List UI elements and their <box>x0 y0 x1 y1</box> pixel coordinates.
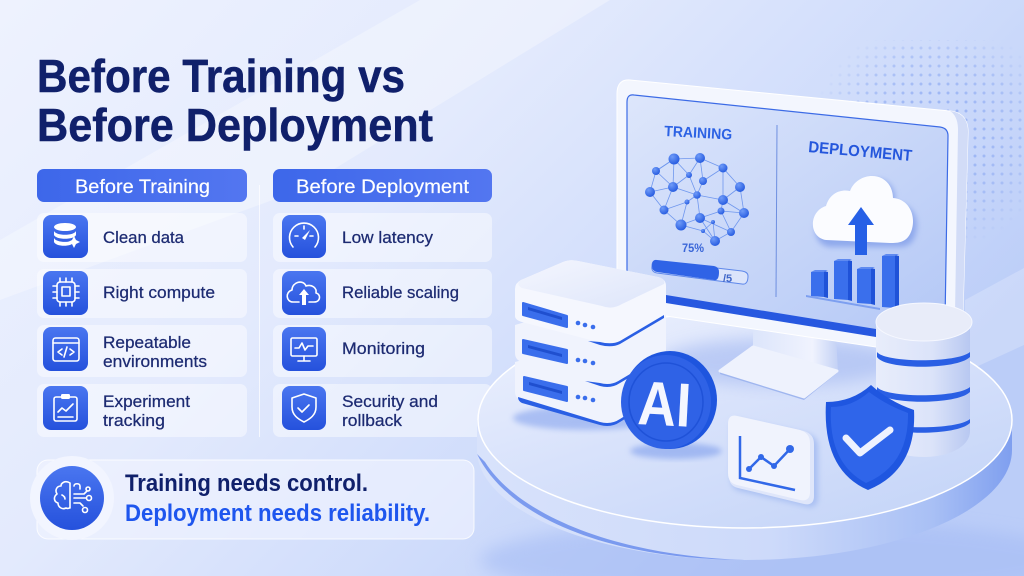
icon: line chart card <box>728 416 818 507</box>
divider between columns <box>259 185 260 437</box>
row: repeatable environments: environments <box>103 352 207 371</box>
progress bar: /5 <box>723 273 732 285</box>
row: experiment tracking: tracking <box>103 411 165 430</box>
title: Before Deployment <box>37 99 433 151</box>
title <box>37 50 433 151</box>
neural network <box>645 153 749 246</box>
row: clean data: Clean data <box>103 228 185 247</box>
monitor <box>617 80 968 400</box>
cloud upload <box>813 176 917 255</box>
heading: before deployment <box>273 169 492 202</box>
callout text: Deployment needs reliability. <box>125 500 430 527</box>
row: experiment tracking: Experiment <box>103 392 190 411</box>
row: low latency <box>273 213 492 262</box>
callout text <box>125 470 430 527</box>
panel: before deployment <box>273 169 492 437</box>
title: Before Training vs <box>37 50 405 102</box>
row: right compute: Right compute <box>103 283 215 302</box>
callout <box>30 456 474 540</box>
heading: before deployment: Before Deployment <box>296 176 470 198</box>
row: monitoring: Monitoring <box>342 339 425 358</box>
row: repeatable environments: Repeatable <box>103 333 191 352</box>
icon: brain circuit <box>30 456 114 540</box>
screen heading: deployment: DEPLOYMENT <box>808 139 913 165</box>
server 3 <box>515 340 652 426</box>
row: security and rollback: Security and <box>342 392 438 411</box>
row: experiment tracking <box>37 384 247 437</box>
row: security and rollback: rollback <box>342 411 402 430</box>
illustration: 3D platform scene <box>477 80 1012 560</box>
monitor screen <box>627 95 948 330</box>
heading: before training: Before Training <box>75 176 210 198</box>
row: reliable scaling <box>273 269 492 318</box>
icon: AI coin <box>621 351 722 459</box>
row: right compute <box>37 269 247 318</box>
panel: before training <box>37 169 247 437</box>
database cylinder <box>876 303 972 457</box>
server stack <box>513 260 666 430</box>
progress bar <box>652 260 748 285</box>
heading: before training <box>37 169 247 202</box>
server 1 <box>515 260 666 346</box>
row: monitoring <box>273 325 492 377</box>
callout text: Training needs control. <box>125 470 368 497</box>
icon: shield check <box>826 385 914 490</box>
row: reliable scaling: Reliable scaling <box>342 283 459 302</box>
screen heading: training: TRAINING <box>664 123 733 144</box>
progress label: 75% <box>682 241 704 255</box>
row: security and rollback <box>273 384 492 437</box>
monitor bezel <box>617 80 968 347</box>
server 2 <box>515 300 666 387</box>
bar chart <box>806 254 899 310</box>
row: repeatable environments <box>37 325 247 377</box>
row: low latency: Low latency <box>342 228 433 247</box>
icon: AI coin: AI <box>636 369 693 441</box>
platform <box>477 312 1012 560</box>
row: clean data <box>37 213 247 262</box>
monitor stand <box>720 322 838 400</box>
